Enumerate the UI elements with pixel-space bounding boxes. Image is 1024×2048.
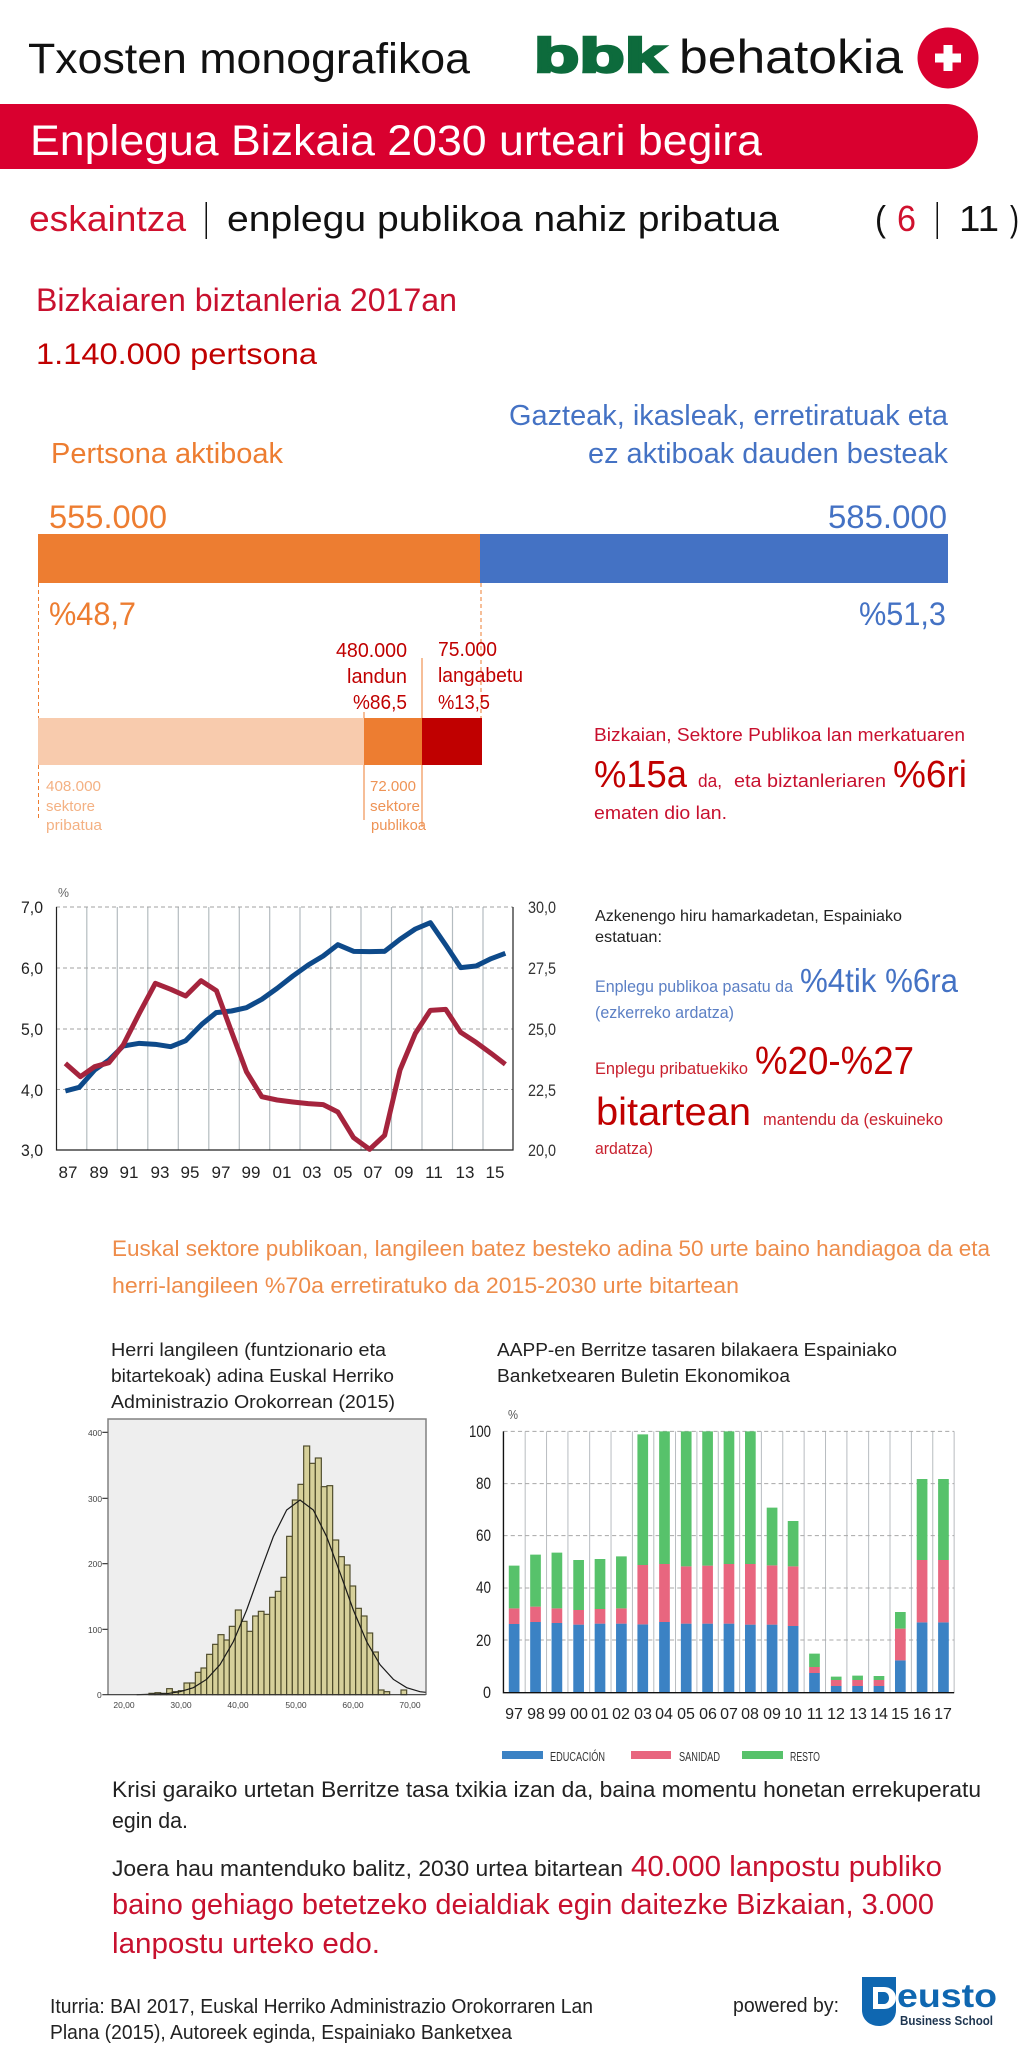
label: public sector: publikoa [371,817,427,834]
legend [502,1749,820,1764]
heading: histogram title: Administrazio Orokorrean (2015) [111,1392,395,1412]
text block: conclusion: baino gehiago betetzeko deialdiak egin daitezke Bizkaian, 3.000 [112,1889,934,1921]
callout: public sector share: da, [698,771,722,791]
logo: bbk behatokia [534,28,978,88]
label: private sector: 408.000 [46,778,101,795]
right axis labels: 20,0 [528,1141,556,1160]
text block: conclusion: Krisi garaiko urtetan Berritze tasa txikia izan da, baina momentu honetan errekuperatu [112,1777,981,1802]
text block: conclusion: egin da. [112,1808,188,1833]
histogram axes [102,1432,426,1695]
year labels: 98 [527,1706,545,1723]
text block: Spanish employment trends: %20-%27 [755,1040,914,1083]
year labels: 01 [591,1706,609,1723]
left axis labels: 7,0 [21,898,43,917]
heading: replacement rate chart title: AAPP-en Berritze tasaren bilakaera Espainiako [497,1340,897,1360]
year labels: 02 [612,1706,630,1723]
text block: Spanish employment trends: %4tik %6ra [800,962,959,999]
year labels: 91 [120,1163,138,1182]
histogram axis labels: 50,00 [285,1700,307,1710]
histogram axis labels: 300 [88,1494,102,1504]
stacked bar [38,534,948,583]
label: employed: landun [347,666,407,688]
y axis labels: 60 [476,1527,491,1545]
heading: replacement rate chart title [497,1340,897,1386]
left axis labels: 5,0 [21,1020,43,1039]
label: employed: 480.000 [336,640,407,662]
year labels: 11 [425,1163,443,1182]
year labels: 99 [548,1706,566,1723]
year labels [505,1706,952,1723]
year labels: 99 [242,1163,260,1182]
series: private employment (red) [65,981,505,1149]
heading: population 2017: 1.140.000 pertsona [36,338,317,371]
label: unemployed: langabetu [438,665,523,687]
logo: Deusto Business School [862,1977,997,2028]
histogram axis labels: 70,00 [399,1700,421,1710]
left axis labels: % [58,885,69,900]
year labels: 89 [90,1163,108,1182]
title: Txosten monografikoa: Txosten monografikoa [28,35,470,83]
text block: Spanish employment trends: bitartean [596,1091,751,1134]
subtitle line with page number [29,198,1019,239]
heading: population 2017: Bizkaiaren biztanleria 2017an [36,282,457,318]
value: 555.000: 555.000 [49,499,167,535]
subtitle line with page number: 6 [897,198,916,239]
value: %51,3: %51,3 [859,596,946,632]
text block: ageing public sector: herri-langileen %70a erretiratuko da 2015-2030 urte bitartean [112,1273,739,1298]
histogram axis labels: 30,00 [170,1700,192,1710]
year labels: 13 [849,1706,867,1723]
right axis labels: 27,5 [528,959,556,978]
text block: sources [50,1996,593,2044]
text block: conclusion: Joera hau mantenduko balitz, 2030 urtea bitartean [112,1856,623,1881]
heading: replacement rate chart title: Banketxearen Buletin Ekonomikoa [497,1366,791,1386]
legend: RESTO [790,1749,820,1764]
series: rest [509,1431,949,1680]
year labels: 06 [699,1706,717,1723]
series: public employment (blue) [65,923,505,1091]
histogram axis labels: 20,00 [113,1700,135,1710]
label: unemployed: %13,5 [438,692,490,714]
y axis labels: 80 [476,1475,491,1493]
normal curve [137,1500,426,1695]
year labels: 05 [334,1163,352,1182]
text block: conclusion: lanpostu urteko edo. [112,1928,380,1960]
text block: Spanish employment trends: Enplegu publikoa pasatu da [595,977,794,996]
subtitle line with page number: ( [875,198,886,239]
year labels: 04 [655,1706,673,1723]
label: private sector: pribatua [46,817,103,834]
y axis labels: 0 [483,1684,491,1702]
text block: ageing public sector: Euskal sektore publikoan, langileen batez besteko adina 50 urte baino handiagoa da eta [112,1236,991,1261]
label: active people: Pertsona aktiboak [51,438,283,470]
subtitle line with page number: 11 [959,198,999,239]
label: employed [336,640,407,714]
y axis labels: 20 [476,1632,491,1650]
label: inactive people: Gazteak, ikasleak, erretiratuak eta [509,400,949,432]
label: public sector [370,778,427,834]
label: public sector: sektore [370,798,420,815]
year labels: 16 [913,1706,931,1723]
label: private sector [46,778,103,834]
histogram axis labels: 40,00 [227,1700,249,1710]
label: unemployed [438,639,523,714]
text block: conclusion [112,1777,981,1960]
histogram axis labels: 400 [88,1428,102,1438]
label: private sector: sektore [46,798,95,815]
year labels: 87 [59,1163,77,1182]
right axis labels: 30,0 [528,898,556,917]
year labels: 14 [870,1706,888,1723]
histogram axis labels: 100 [88,1625,102,1635]
left axis labels: 4,0 [21,1081,43,1100]
year labels: 17 [934,1706,952,1723]
logo: bbk behatokia: behatokia [679,30,904,83]
year labels: 03 [303,1163,321,1182]
callout: public sector share: eta biztanleriaren [734,771,886,791]
label: public sector: 72.000 [370,778,416,795]
text block: ageing public sector [112,1236,991,1298]
heading: histogram title: Herri langileen (funtzionario eta [111,1340,387,1360]
year labels: 09 [395,1163,413,1182]
callout: public sector share [594,724,967,823]
header: report title and logo [28,28,978,88]
text block: Spanish employment trends: ardatza) [595,1139,653,1158]
year labels: 12 [827,1706,845,1723]
logo: Deusto Business School: Business School [900,2013,993,2028]
histogram bars [149,1446,407,1695]
series: health [509,1560,949,1686]
legend: SANIDAD [679,1749,720,1764]
logo: bbk behatokia: bbk [534,30,666,83]
histogram axis labels: 200 [88,1559,102,1569]
year labels: 93 [151,1163,169,1182]
year labels: 07 [720,1706,738,1723]
year labels: 15 [486,1163,504,1182]
histogram axis labels [88,1428,421,1710]
histogram: age of public workers [88,1419,426,1710]
year labels: 15 [891,1706,909,1723]
banner: main title [0,104,978,169]
text block: Spanish employment trends: mantendu da (eskuineko [763,1110,943,1129]
year labels: 07 [364,1163,382,1182]
text block: sources: Plana (2015), Autoreek eginda, Espainiako Banketxea [50,2022,513,2044]
logo: Deusto Business School: eusto [897,1977,997,2014]
right axis labels: 22,5 [528,1081,556,1100]
year labels: 97 [505,1706,523,1723]
panel: breakdown of active population [38,639,523,834]
y axis labels: 100 [469,1423,491,1441]
y axis labels: 40 [476,1579,491,1597]
series: education [509,1622,949,1693]
text block: conclusion: 40.000 lanpostu publiko [631,1851,942,1883]
left axis labels [21,885,69,1160]
banner: main title: Enplegua Bizkaia 2030 urteari begira [30,117,762,165]
histogram axis labels: 60,00 [342,1700,364,1710]
callout: public sector share: %15a [594,754,688,796]
y axis labels [469,1407,518,1702]
left axis labels: 3,0 [21,1141,43,1160]
year labels: 11 [807,1706,823,1723]
subtitle line with page number: eskaintza [29,198,187,239]
year labels: 10 [784,1706,802,1723]
label: unemployed: 75.000 [438,639,497,661]
label: employed: %86,5 [353,692,407,714]
year labels: 00 [570,1706,588,1723]
line chart: public and private employment [21,885,556,1182]
y axis labels: % [508,1407,518,1422]
stacked bar chart: replacement rate [469,1407,954,1764]
callout: public sector share: Bizkaian, Sektore Publikoa lan merkatuaren [594,724,965,745]
right axis labels: 25,0 [528,1020,556,1039]
text block: Spanish employment trends [595,908,959,1158]
year labels: 01 [273,1163,291,1182]
year labels: 95 [181,1163,199,1182]
text block: Spanish employment trends: (ezkerreko ardatza) [595,1003,734,1022]
heading: histogram title [111,1340,395,1412]
year labels: 97 [212,1163,230,1182]
callout: public sector share: ematen dio lan. [594,802,727,823]
label: inactive people [509,400,949,470]
panel: active vs inactive population bar [38,400,949,820]
value: 585.000: 585.000 [828,499,947,535]
left axis labels: 6,0 [21,959,43,978]
label: inactive people: ez aktiboak dauden besteak [588,438,948,470]
callout: public sector share: %6ri [893,754,967,796]
year labels [59,1163,504,1182]
text block: Spanish employment trends: Enplegu pribatuekiko [595,1059,748,1078]
heading: histogram title: bitartekoak) adina Euskal Herriko [111,1366,394,1386]
legend: EDUCACIÓN [550,1749,605,1764]
year labels: 03 [634,1706,652,1723]
subtitle line with page number: enplegu publikoa nahiz pribatua [227,198,780,239]
text block: Spanish employment trends: Azkenengo hiru hamarkadetan, Espainiako [595,908,902,925]
heading: population 2017 [36,282,457,371]
year labels: 05 [677,1706,695,1723]
year labels: 08 [741,1706,759,1723]
year labels: 09 [763,1706,781,1723]
year labels: 13 [456,1163,474,1182]
breakdown bar [38,718,482,765]
value: %48,7: %48,7 [49,596,136,632]
text block: sources: Iturria: BAI 2017, Euskal Herriko Administrazio Orokorraren Lan [50,1996,593,2018]
text block: Spanish employment trends: estatuan: [595,929,662,946]
text: powered by: powered by: [733,1995,839,2017]
subtitle line with page number: ) [1010,198,1019,239]
histogram axis labels: 0 [97,1690,102,1700]
right axis labels [528,898,556,1160]
